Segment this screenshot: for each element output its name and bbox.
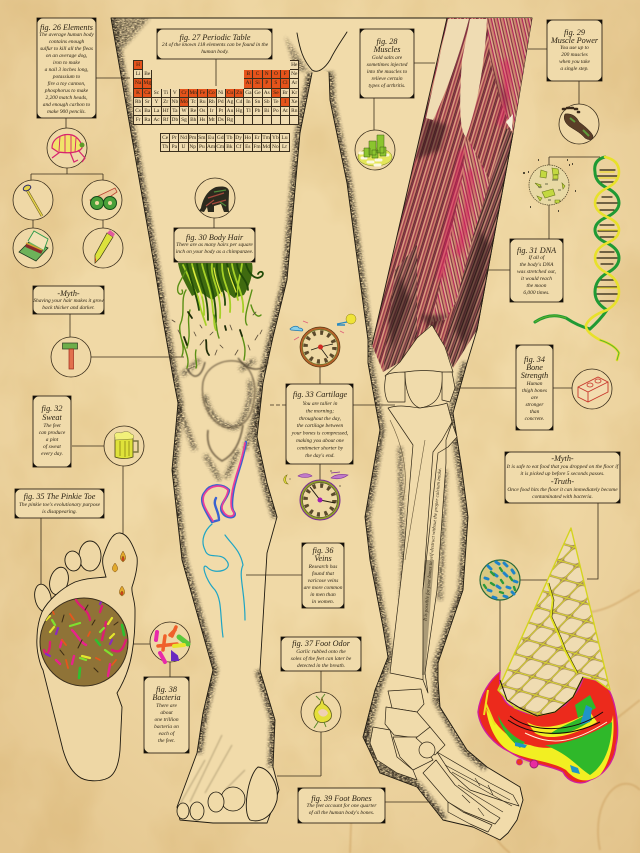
text block: a single step. [560, 66, 589, 72]
chart: periodic table main block: At [282, 108, 288, 114]
heading: fig. 36 [313, 546, 334, 555]
chart: periodic table lanthanides and actinides: Pa [172, 144, 177, 150]
panel: fig 27 periodic table heading [157, 29, 272, 59]
chart: periodic table lanthanides and actinides: Lu [282, 135, 288, 141]
chart: periodic table main block: Ac [153, 117, 160, 123]
chart: periodic table main block: Be [144, 71, 150, 77]
chart: periodic table main block: Ca [144, 90, 150, 96]
heading: Sweat [42, 413, 63, 422]
icon: flea [47, 128, 87, 168]
icon: razor [51, 337, 91, 377]
text block: iron to make [53, 60, 81, 66]
chart: periodic table lanthanides and actinides: Pm [189, 135, 196, 141]
chart: periodic table main block: Zn [236, 90, 242, 96]
chart: periodic table main block: Hf [163, 108, 168, 114]
text block: 24 of the known 118 elements can be found in the [162, 41, 269, 48]
chart: periodic table main block: Co [208, 90, 215, 96]
chart: periodic table main block: In [246, 99, 251, 105]
text block: Gold salts are [372, 55, 403, 61]
chart: periodic table main block: K [136, 90, 140, 96]
text block: contains enough [49, 39, 85, 45]
text block: The feet [43, 422, 61, 429]
chart: periodic table lanthanides and actinides: Es [245, 144, 250, 150]
chart: periodic table main block: Cd [236, 99, 242, 105]
chart: periodic table main block: Sr [145, 99, 150, 105]
chart: periodic table main block: Nb [172, 99, 178, 105]
text block: Shaving your hair makes it grow [33, 298, 104, 304]
chart: periodic table main block: Rb [135, 99, 141, 105]
chart: periodic table main block: Te [273, 99, 279, 105]
chart: periodic table main block [133, 60, 299, 125]
right leg bones [385, 325, 457, 693]
chart: periodic table main block: Cl [283, 80, 288, 86]
text block: throughout the day, [299, 416, 342, 422]
text block: soles of the feet can later be [291, 655, 352, 662]
text block: You are taller in [303, 401, 338, 407]
text block: make 900 pencils. [47, 109, 86, 115]
chart: periodic table lanthanides and actinides: Cm [216, 144, 224, 150]
text block: are more common [304, 585, 343, 591]
chart: periodic table main block: W [181, 108, 187, 114]
chart: periodic table main block: Mo [180, 99, 188, 105]
icon: sun and clouds [290, 314, 356, 340]
icon: nail [13, 180, 53, 220]
heading: fig. 26 Elements [40, 23, 93, 32]
text block: every day. [41, 451, 63, 457]
left knee cap [188, 358, 268, 461]
chart: periodic table main block: H [136, 62, 140, 68]
text block: 2,200 match heads, [46, 95, 88, 101]
chart: periodic table lanthanides and actinides: Dy [235, 135, 242, 141]
panel: fig 26 elements [37, 18, 96, 118]
text block: a nail 3 inches long, [45, 67, 89, 73]
chart: periodic table main block: Tl [246, 108, 251, 114]
text block: The average human body [39, 32, 94, 38]
chart: periodic table main block: Se [273, 90, 279, 96]
text block: You use up to [560, 45, 589, 51]
chart: periodic table lanthanides and actinides: Eu [208, 135, 214, 141]
chart: periodic table main block: Ds [218, 117, 224, 123]
illustration: foot sole outline [32, 533, 137, 781]
panel: fig 33 cartilage [286, 384, 353, 464]
legs figure [111, 18, 532, 840]
text block: concrete. [525, 416, 544, 422]
heading: -Myth- [551, 454, 574, 463]
text block: in women. [312, 599, 334, 605]
chart: periodic table main block: N [265, 71, 269, 77]
panel: fig 28 muscles [360, 29, 414, 98]
text block: was stretched out, [517, 269, 557, 275]
text block: 6,000 times. [523, 290, 550, 296]
left foot and toes [177, 735, 277, 821]
text block: human body. [201, 49, 229, 55]
chart: periodic table main block: Kr [291, 90, 297, 96]
chart: periodic table main block: Mn [189, 90, 197, 96]
chart: periodic table main block: Fe [200, 90, 205, 96]
chart: periodic table lanthanides and actinides: Lr [282, 144, 287, 150]
chart: periodic table main block: Ar [291, 80, 297, 86]
illustration: broken waffle cone [498, 528, 610, 716]
chart: periodic table main block: Mg [144, 80, 151, 86]
text block: stronger [525, 402, 544, 408]
chart: periodic table main block: Db [172, 117, 178, 123]
text block: of sweat [43, 443, 61, 450]
text block: thigh bones [522, 388, 547, 394]
chart: periodic table main block: Li [136, 71, 140, 77]
text block: potassium to [52, 74, 81, 80]
text block: Garlic rubbed onto the [296, 649, 346, 655]
chart: periodic table main block: C [256, 71, 259, 77]
text block: your bones is compressed, [291, 431, 349, 437]
chart: periodic table main block: Br [282, 90, 288, 96]
icon: pencil [83, 228, 123, 268]
chart: periodic table main block: Pb [255, 108, 260, 114]
illustration: green body hair [172, 263, 263, 368]
text block: truth: Once food hits the floor it can immediately become [507, 486, 618, 493]
text block: inch on your body as a chimpanzee. [176, 249, 253, 255]
heading: Strength [521, 371, 548, 380]
icon: garlic [301, 692, 341, 732]
panel: fig 34 bone strength [516, 345, 553, 430]
fibula vertical note: It is possible for your bones to self-destruct without the proper calcium intake. [423, 467, 443, 622]
text block: the day's end. [305, 453, 335, 459]
panel: fig 29 muscle power [547, 20, 602, 81]
chart: periodic table main block: Rg [227, 117, 233, 123]
heading: fig. 32 [42, 404, 62, 413]
chart: periodic table main block: La [154, 108, 159, 114]
chart: periodic table main block: He [291, 62, 297, 68]
chart: periodic table main block: Cu [227, 90, 233, 96]
text block: the body's DNA [520, 262, 554, 268]
chart: periodic table main block: Ir [210, 108, 213, 114]
illustration: veins [202, 442, 246, 637]
chart: periodic table main block: Cr [181, 90, 187, 96]
chart: periodic table lanthanides and actinides [160, 133, 290, 152]
chart: periodic table main block: F [284, 71, 287, 77]
chart: periodic table lanthanides and actinides: Am [207, 144, 215, 150]
illustration: melted ice cream [478, 672, 618, 783]
text block: the feet. [158, 737, 175, 744]
heading: fig. 29 [564, 28, 585, 37]
text block: found that [312, 570, 335, 577]
text block: detected in the breath. [297, 663, 345, 669]
chart: periodic table lanthanides and actinides: Pu [199, 144, 205, 150]
heading: fig. 37 Foot Odor [292, 639, 351, 648]
text block: and enough carbon to [43, 102, 91, 108]
chart: periodic table main block: Ti [163, 90, 168, 96]
chart: periodic table main block: Ag [227, 99, 233, 105]
icon: gorilla [195, 178, 235, 218]
chart: periodic table main block: Rn [291, 108, 297, 114]
right foot bones [370, 689, 519, 832]
text block: It is safe to eat food that you dropped on the floor if [506, 463, 620, 470]
chart: periodic table main block: Sg [181, 117, 187, 123]
panel: fig 38 bacteria [144, 677, 189, 753]
chart: periodic table lanthanides and actinides: Th [162, 144, 168, 150]
text block: can produce [39, 430, 66, 436]
chart: periodic table main block: Ga [245, 90, 251, 96]
illustration: bacteria circle on sole [40, 598, 128, 686]
text block: than [530, 409, 540, 415]
text block: it would reach [521, 276, 552, 282]
text block: about [160, 710, 173, 716]
text block: when you take [559, 59, 591, 65]
text block: one trillion [154, 717, 179, 723]
chart: periodic table main block: Ge [254, 90, 261, 96]
chart: periodic table main block: B [247, 71, 250, 77]
heading: fig. 34 [524, 355, 545, 364]
chart: periodic table main block: Au [227, 108, 233, 114]
text block: centimeter shorter by [297, 445, 344, 451]
icon: matchbook [13, 228, 53, 268]
text block: back thicker and darker. [42, 305, 95, 311]
heading: truth: -Truth- [551, 477, 574, 486]
chart: periodic table main block: Rh [208, 99, 215, 105]
icon: cannon [82, 180, 122, 220]
text block: it is picked up before 5 seconds passes. [520, 470, 605, 477]
icon: concrete block [572, 369, 612, 409]
right thigh muscles [372, 18, 532, 372]
chart: periodic table lanthanides and actinides: Fm [253, 144, 261, 150]
text block: on an average dog, [46, 53, 88, 59]
chart: periodic table main block: Re [190, 108, 196, 114]
panel: fig 37 foot odor [281, 637, 361, 671]
heading: fig. 35 The Pinkie Toe [24, 492, 96, 501]
chart: periodic table lanthanides and actinides: Tb [226, 135, 232, 141]
chart: periodic table main block: Hs [199, 117, 205, 123]
text block: sometimes injected [367, 62, 408, 68]
heading: Bone [526, 363, 543, 372]
chart: periodic table lanthanides and actinides: Nd [180, 135, 187, 141]
icon: sprinkles circle [480, 560, 520, 600]
chart: periodic table lanthanides and actinides: Ho [244, 135, 251, 141]
chart: periodic table main block: Sc [154, 90, 159, 96]
chart: periodic table lanthanides and actinides: Md [262, 144, 270, 150]
text block: in men than [310, 592, 336, 598]
chart: periodic table main block: Pd [218, 99, 224, 105]
chart: periodic table main block: O [274, 71, 278, 77]
chart: periodic table main block: Na [135, 80, 141, 86]
heading: fig. 38 [156, 685, 177, 694]
text block: are [531, 395, 539, 401]
chart: periodic table main block: Po [273, 108, 279, 114]
panel: fig 35 pinkie toe [15, 489, 104, 518]
chart: periodic table main block: Hg [236, 108, 242, 114]
text block: bacteria on [154, 724, 179, 730]
chart: periodic table main block: Ru [199, 99, 206, 105]
text block: The pinkie toe's evolutionary purpose [19, 502, 101, 508]
chart: periodic table main block: Zr [163, 99, 168, 105]
icon: morning clock [300, 327, 340, 367]
chart: periodic table main block: Sb [264, 99, 270, 105]
panel: fig 32 sweat [33, 396, 71, 467]
chart: periodic table main block: Si [255, 80, 260, 86]
text block: the morning; [306, 408, 334, 414]
chart: periodic table main block: Ta [172, 108, 178, 114]
chart: periodic table main block: Ne [291, 71, 297, 77]
heading: Muscles [373, 45, 400, 54]
text block: The feet account for one quarter [307, 802, 377, 809]
icon: cell with DNA [523, 160, 576, 211]
text block: into the muscles to [367, 69, 407, 75]
connector lines [31, 49, 600, 802]
text block: There are [156, 703, 177, 709]
chart: periodic table main block: Os [199, 108, 205, 114]
chart: periodic table main block: Al [246, 80, 251, 86]
chart: periodic table main block: As [264, 90, 270, 96]
chart: periodic table lanthanides and actinides: Gd [217, 135, 224, 141]
chart: periodic table lanthanides and actinides: Er [254, 135, 260, 141]
chart: periodic table main block: Ra [144, 117, 150, 123]
icon: gold pills [355, 130, 395, 170]
chart: periodic table main block: Cs [135, 108, 141, 114]
chart: periodic table main block: Y [155, 99, 158, 105]
chart: periodic table lanthanides and actinides: Cf [236, 144, 241, 150]
heading: fig. 30 Body Hair [186, 233, 244, 242]
icon: beer mug [104, 426, 144, 466]
chart: periodic table main block: Ba [144, 108, 150, 114]
heading: fig. 31 DNA [517, 246, 557, 255]
heading: fig. 27 Periodic Table [179, 33, 251, 42]
text block: relieve certain [371, 76, 403, 82]
chart: periodic table main block: S [274, 80, 277, 86]
chart: periodic table lanthanides and actinides: Np [189, 144, 196, 150]
chart: periodic table main block: V [173, 90, 177, 96]
chart: periodic table main block: Xe [291, 99, 297, 105]
heading: Veins [314, 554, 332, 563]
panel: fig 31 DNA [510, 239, 563, 302]
panel: fig 39 foot bones [298, 788, 385, 823]
heading: fig. 39 Foot Bones [311, 794, 372, 803]
text block: truth: contaminated with bacteria. [532, 494, 593, 500]
panel: fig 30 body hair [174, 228, 255, 262]
text block: sulfur to kill all the fleas [40, 45, 93, 52]
chart: periodic table lanthanides and actinides: U [182, 144, 185, 150]
icon: magnified bacteria [150, 622, 190, 662]
chart: periodic table main block: Fr [136, 117, 140, 123]
chart: periodic table main block: Ni [218, 90, 223, 96]
chart: periodic table lanthanides and actinides: Tm [262, 135, 270, 141]
text block: a pint [46, 437, 59, 443]
panel: myth and truth about dropped food [505, 452, 620, 503]
chart: periodic table main block: Rf [163, 117, 168, 123]
text block: the moon [527, 283, 547, 289]
text block: the cartilage between [297, 423, 344, 429]
panel: myth shaving [33, 286, 104, 314]
chart: periodic table lanthanides and actinides: Sm [198, 135, 205, 141]
text block: 200 muscles [561, 52, 588, 58]
heading: fig. 28 [377, 37, 397, 46]
icon: evening clock [300, 480, 340, 520]
chart: periodic table lanthanides and actinides: Bk [226, 144, 233, 150]
chart: periodic table lanthanides and actinides: Ce [162, 135, 168, 141]
text block: of all the human body's bones. [309, 809, 374, 816]
chart: periodic table lanthanides and actinides: Yb [272, 135, 279, 141]
chart: periodic table main block: Tc [191, 99, 196, 105]
icon: sweat drops [112, 551, 126, 596]
text block: Human [526, 381, 543, 387]
heading: Bacteria [152, 693, 181, 702]
text block: phosphorus to make [44, 88, 89, 94]
chart: periodic table main block: P [265, 80, 268, 86]
chart: periodic table lanthanides and actinides: No [272, 144, 279, 150]
icon: footprint [559, 104, 599, 144]
heading: Muscle Power [550, 36, 599, 45]
chart: periodic table lanthanides and actinides: Pr [172, 135, 177, 141]
heading: fig. 33 Cartilage [293, 390, 348, 399]
text block: making you about one [296, 438, 344, 444]
chart: periodic table main block: Pt [219, 108, 223, 114]
chart: periodic table main block: Bh [190, 117, 196, 123]
text block: is disappearing. [42, 509, 77, 515]
text block: varicose veins [308, 578, 338, 584]
panel: fig 36 veins [302, 543, 344, 608]
icon: moon and clouds [284, 470, 348, 487]
text block: types of arthritis. [368, 82, 406, 89]
chart: periodic table main block: Sn [255, 99, 260, 105]
chart: periodic table main block: I [284, 99, 286, 105]
chart: periodic table main block: Mt [208, 117, 215, 123]
illustration: DNA helix [535, 157, 619, 360]
chart: periodic table main block: Bi [264, 108, 269, 114]
text block: Research has [308, 564, 337, 570]
heading: -Myth- [57, 289, 80, 298]
text block: There are as many hairs per square [176, 242, 253, 248]
text block: fire a toy cannon, [48, 80, 86, 87]
text block: If all of [528, 254, 546, 261]
text block: each of [159, 730, 176, 737]
